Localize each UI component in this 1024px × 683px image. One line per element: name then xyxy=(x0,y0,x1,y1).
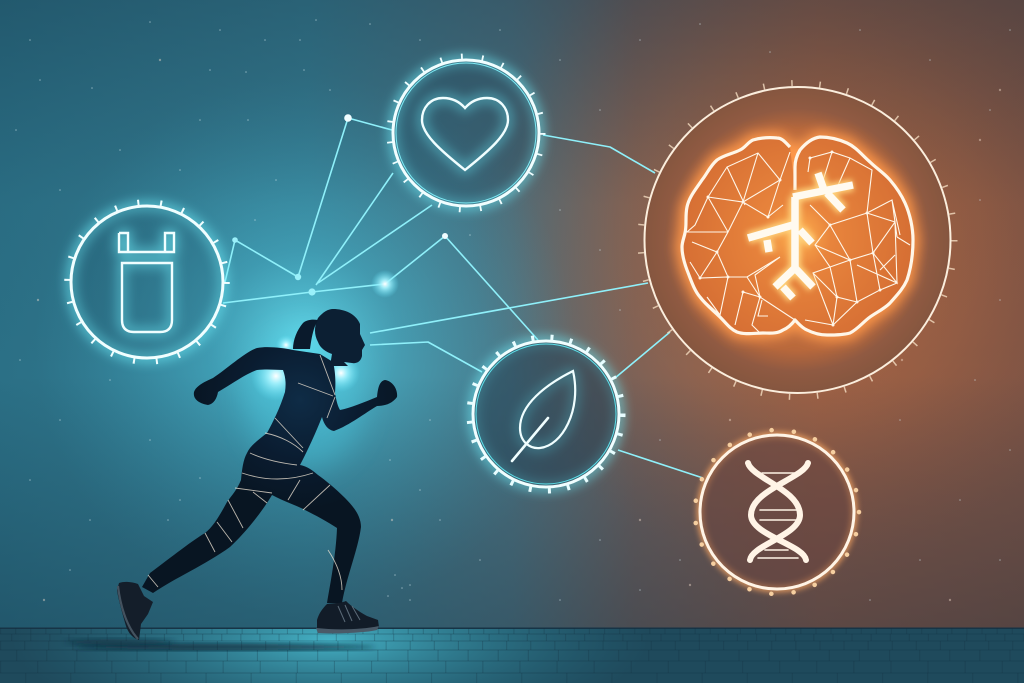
rear shoe xyxy=(117,582,153,640)
connector lines xyxy=(223,118,703,478)
ground with paving xyxy=(0,628,1024,683)
brain outline xyxy=(682,137,913,335)
icon: heart in circle xyxy=(390,56,542,210)
runner glow spots xyxy=(245,330,365,470)
runner silhouette xyxy=(117,309,397,640)
rear shoe sole xyxy=(118,586,138,639)
suit seam lines xyxy=(148,355,342,590)
glowing neural branch xyxy=(748,173,853,298)
connector nodes xyxy=(232,114,448,298)
brain glow xyxy=(682,137,913,335)
icon: brain in large circle xyxy=(640,83,954,397)
icon: bottle in circle xyxy=(68,202,226,362)
front shoe xyxy=(317,601,379,630)
runner head xyxy=(315,309,365,366)
icon: leaf in circle xyxy=(470,338,622,490)
runner ponytail xyxy=(293,320,318,349)
icon: DNA in circle xyxy=(695,430,859,594)
front shoe sole xyxy=(316,626,379,633)
shoe stripes xyxy=(338,605,360,622)
brain network xyxy=(687,152,910,333)
runner body xyxy=(142,347,397,603)
